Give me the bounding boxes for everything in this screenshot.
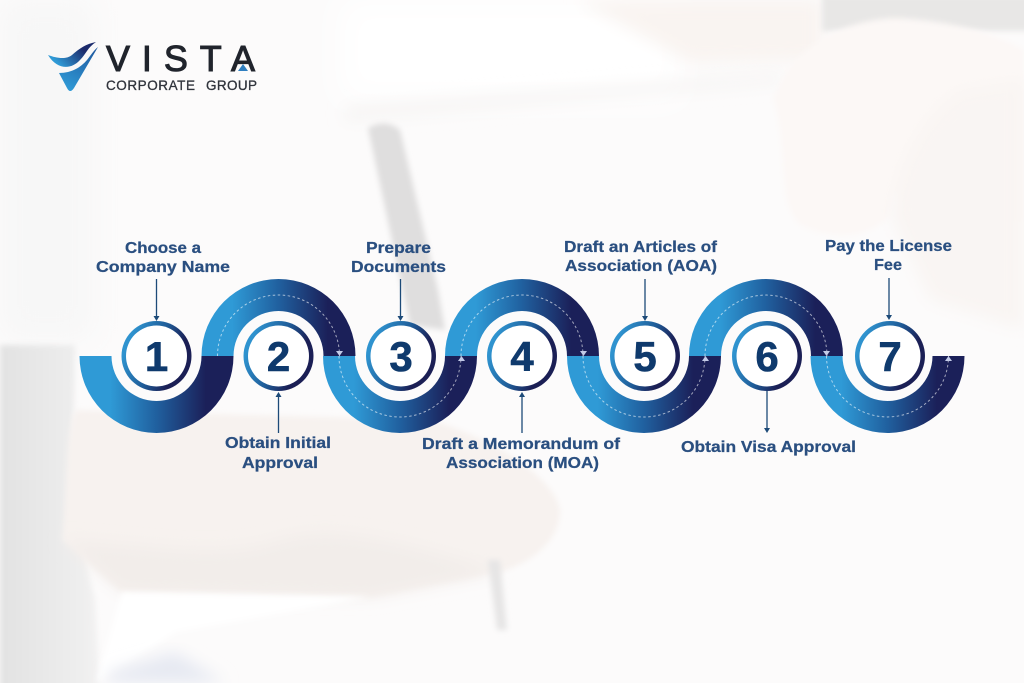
arrow: step 1 <box>154 279 160 321</box>
step 1 badge <box>122 321 192 391</box>
step 6 badge <box>732 321 802 391</box>
label: Prepare Documents: Prepare <box>366 240 431 257</box>
label: Obtain Initial Approval <box>225 435 331 472</box>
arrow: step 5 <box>642 279 648 321</box>
step 3 badge <box>366 321 436 391</box>
label: Pay the License Fee <box>825 238 952 274</box>
step 1 badge: 1 <box>145 333 168 380</box>
label: Pay the License Fee: Pay the License <box>825 238 952 255</box>
logo accent triangle <box>238 64 248 71</box>
arc 3 <box>323 356 477 433</box>
icon: logo mark <box>48 42 98 91</box>
step 4 badge: 4 <box>510 333 534 380</box>
arrow: step 3 <box>398 279 404 321</box>
arc 2 <box>202 279 356 356</box>
label: Pay the License Fee: Fee <box>874 257 902 274</box>
step 5 badge: 5 <box>633 333 657 380</box>
logo wordmark: VISTA <box>106 38 255 79</box>
label: Obtain Initial Approval: Approval <box>242 455 318 472</box>
arrow: step 4 <box>519 392 525 433</box>
arrow: step 7 <box>886 278 892 320</box>
step 2 badge <box>244 321 314 391</box>
arc 7 <box>810 356 964 433</box>
arc 6 <box>689 279 843 356</box>
logo tagline: corporate: CORPORATE <box>106 78 195 93</box>
step 5 badge <box>610 321 680 391</box>
logo: Vista Corporate Group <box>48 38 257 93</box>
label: Choose a Company Name: Company Name <box>96 259 230 276</box>
arrow: step 2 <box>276 392 282 433</box>
dashed guide line with arrowheads <box>218 295 952 417</box>
step 7 badge <box>855 321 925 391</box>
step 3 badge: 3 <box>389 333 413 380</box>
label: Draft a Memorandum of Association (MOA) <box>422 436 621 472</box>
step 6 badge: 6 <box>755 333 779 380</box>
label: Choose a Company Name: Choose a <box>125 240 201 257</box>
label: Draft an Articles of Association (AOA): Draft an Articles of <box>564 239 718 256</box>
label: Obtain Visa Approval: Obtain Visa Approval <box>681 439 856 456</box>
step 7 badge: 7 <box>878 333 902 380</box>
arc 4 <box>445 279 599 356</box>
label: Prepare Documents <box>351 240 446 276</box>
label: Draft an Articles of Association (AOA): Association (AOA) <box>565 258 717 275</box>
arc 1 <box>80 356 234 433</box>
wave ribbon <box>80 279 964 433</box>
label: Choose a Company Name <box>96 240 230 276</box>
step 4 badge <box>487 321 557 391</box>
label: Prepare Documents: Documents <box>351 259 446 276</box>
label: Draft a Memorandum of Association (MOA): Draft a Memorandum of <box>422 436 621 453</box>
label: Obtain Initial Approval: Obtain Initial <box>225 435 331 452</box>
label: Draft an Articles of Association (AOA) <box>564 239 718 275</box>
step 2 badge: 2 <box>267 333 290 380</box>
label: Draft a Memorandum of Association (MOA): Association (MOA) <box>446 455 599 472</box>
logo tagline: group: GROUP <box>206 78 257 93</box>
arc 5 <box>567 356 721 433</box>
arrow: step 6 <box>764 391 770 433</box>
